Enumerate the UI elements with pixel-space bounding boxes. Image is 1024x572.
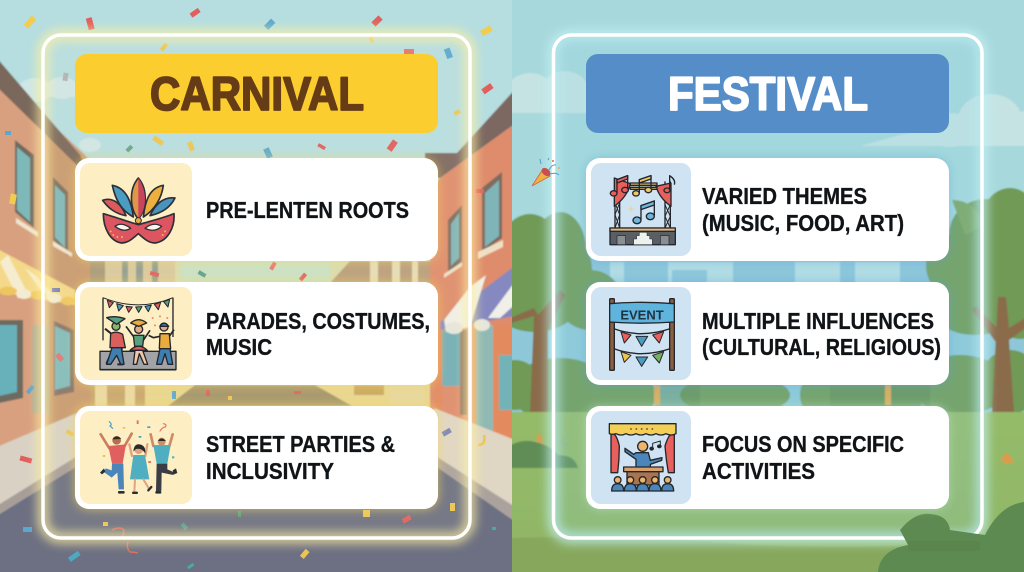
card: focus on specific activities xyxy=(586,406,949,509)
card: pre-lenten roots xyxy=(75,158,438,261)
icon: dancing people xyxy=(100,420,177,494)
carnival column xyxy=(75,54,438,509)
right sidewalk xyxy=(433,408,512,506)
heading: festival xyxy=(586,54,949,133)
text: focus on specific activities: ACTIVITIES xyxy=(702,458,815,484)
right buildings xyxy=(429,124,512,425)
text: street parties and inclusivity: STREET PARTIES & xyxy=(206,431,395,457)
text: focus on specific activities xyxy=(702,431,904,484)
text: varied themes: (MUSIC, FOOD, ART) xyxy=(702,210,904,236)
icon: event banner xyxy=(610,299,674,370)
trunks xyxy=(512,290,565,412)
text: multiple influences: (CULTURAL, RELIGIOUS) xyxy=(702,334,941,360)
panel: carnival street background xyxy=(0,0,520,572)
heading: carnival: CARNIVAL xyxy=(150,67,364,120)
foreground bush xyxy=(878,502,1024,572)
heading: festival: FESTIVAL xyxy=(668,67,868,120)
distant bushes xyxy=(512,349,1024,413)
tree left xyxy=(512,212,616,333)
left awning xyxy=(0,245,75,305)
festival column xyxy=(586,54,949,509)
text: varied themes xyxy=(702,183,904,236)
text: multiple influences: MULTIPLE INFLUENCES xyxy=(702,308,934,334)
right awning xyxy=(439,267,512,331)
card: varied themes xyxy=(586,158,949,261)
tree right xyxy=(926,188,1024,339)
text: parades, costumes, music: PARADES, COSTUMES, xyxy=(206,308,430,334)
left buildings xyxy=(0,88,49,446)
card: street parties and inclusivity xyxy=(75,406,438,509)
distant structures xyxy=(610,262,900,284)
road xyxy=(0,462,520,572)
heading: carnival xyxy=(75,54,438,133)
text: street parties and inclusivity xyxy=(206,431,395,484)
panel: festival park background xyxy=(490,0,1024,572)
text: multiple influences xyxy=(702,308,941,360)
distant street xyxy=(75,255,440,420)
text: varied themes: VARIED THEMES xyxy=(702,183,867,209)
icon: parade performers xyxy=(100,298,176,370)
text: focus on specific activities: FOCUS ON SPECIFIC xyxy=(702,431,904,457)
icon: music stage xyxy=(610,176,675,245)
text: street parties and inclusivity: INCLUSIVITY xyxy=(206,458,334,484)
icon: theatre stage xyxy=(609,424,676,491)
icon: carnival mask xyxy=(103,178,175,243)
grass xyxy=(512,410,1024,548)
text: parades, costumes, music xyxy=(206,308,430,360)
icon: party popper xyxy=(532,158,560,186)
confetti xyxy=(5,8,496,569)
card: multiple influences xyxy=(586,282,949,385)
festival outer glowing frame xyxy=(554,35,982,538)
left sidewalk xyxy=(0,412,78,504)
text: parades, costumes, music: MUSIC xyxy=(206,334,272,360)
icon: event banner: EVENT xyxy=(620,308,664,322)
text: pre-lenten roots: PRE-LENTEN ROOTS xyxy=(206,197,409,223)
carnival outer glowing frame xyxy=(43,35,470,538)
card: parades, costumes, music xyxy=(75,282,438,385)
